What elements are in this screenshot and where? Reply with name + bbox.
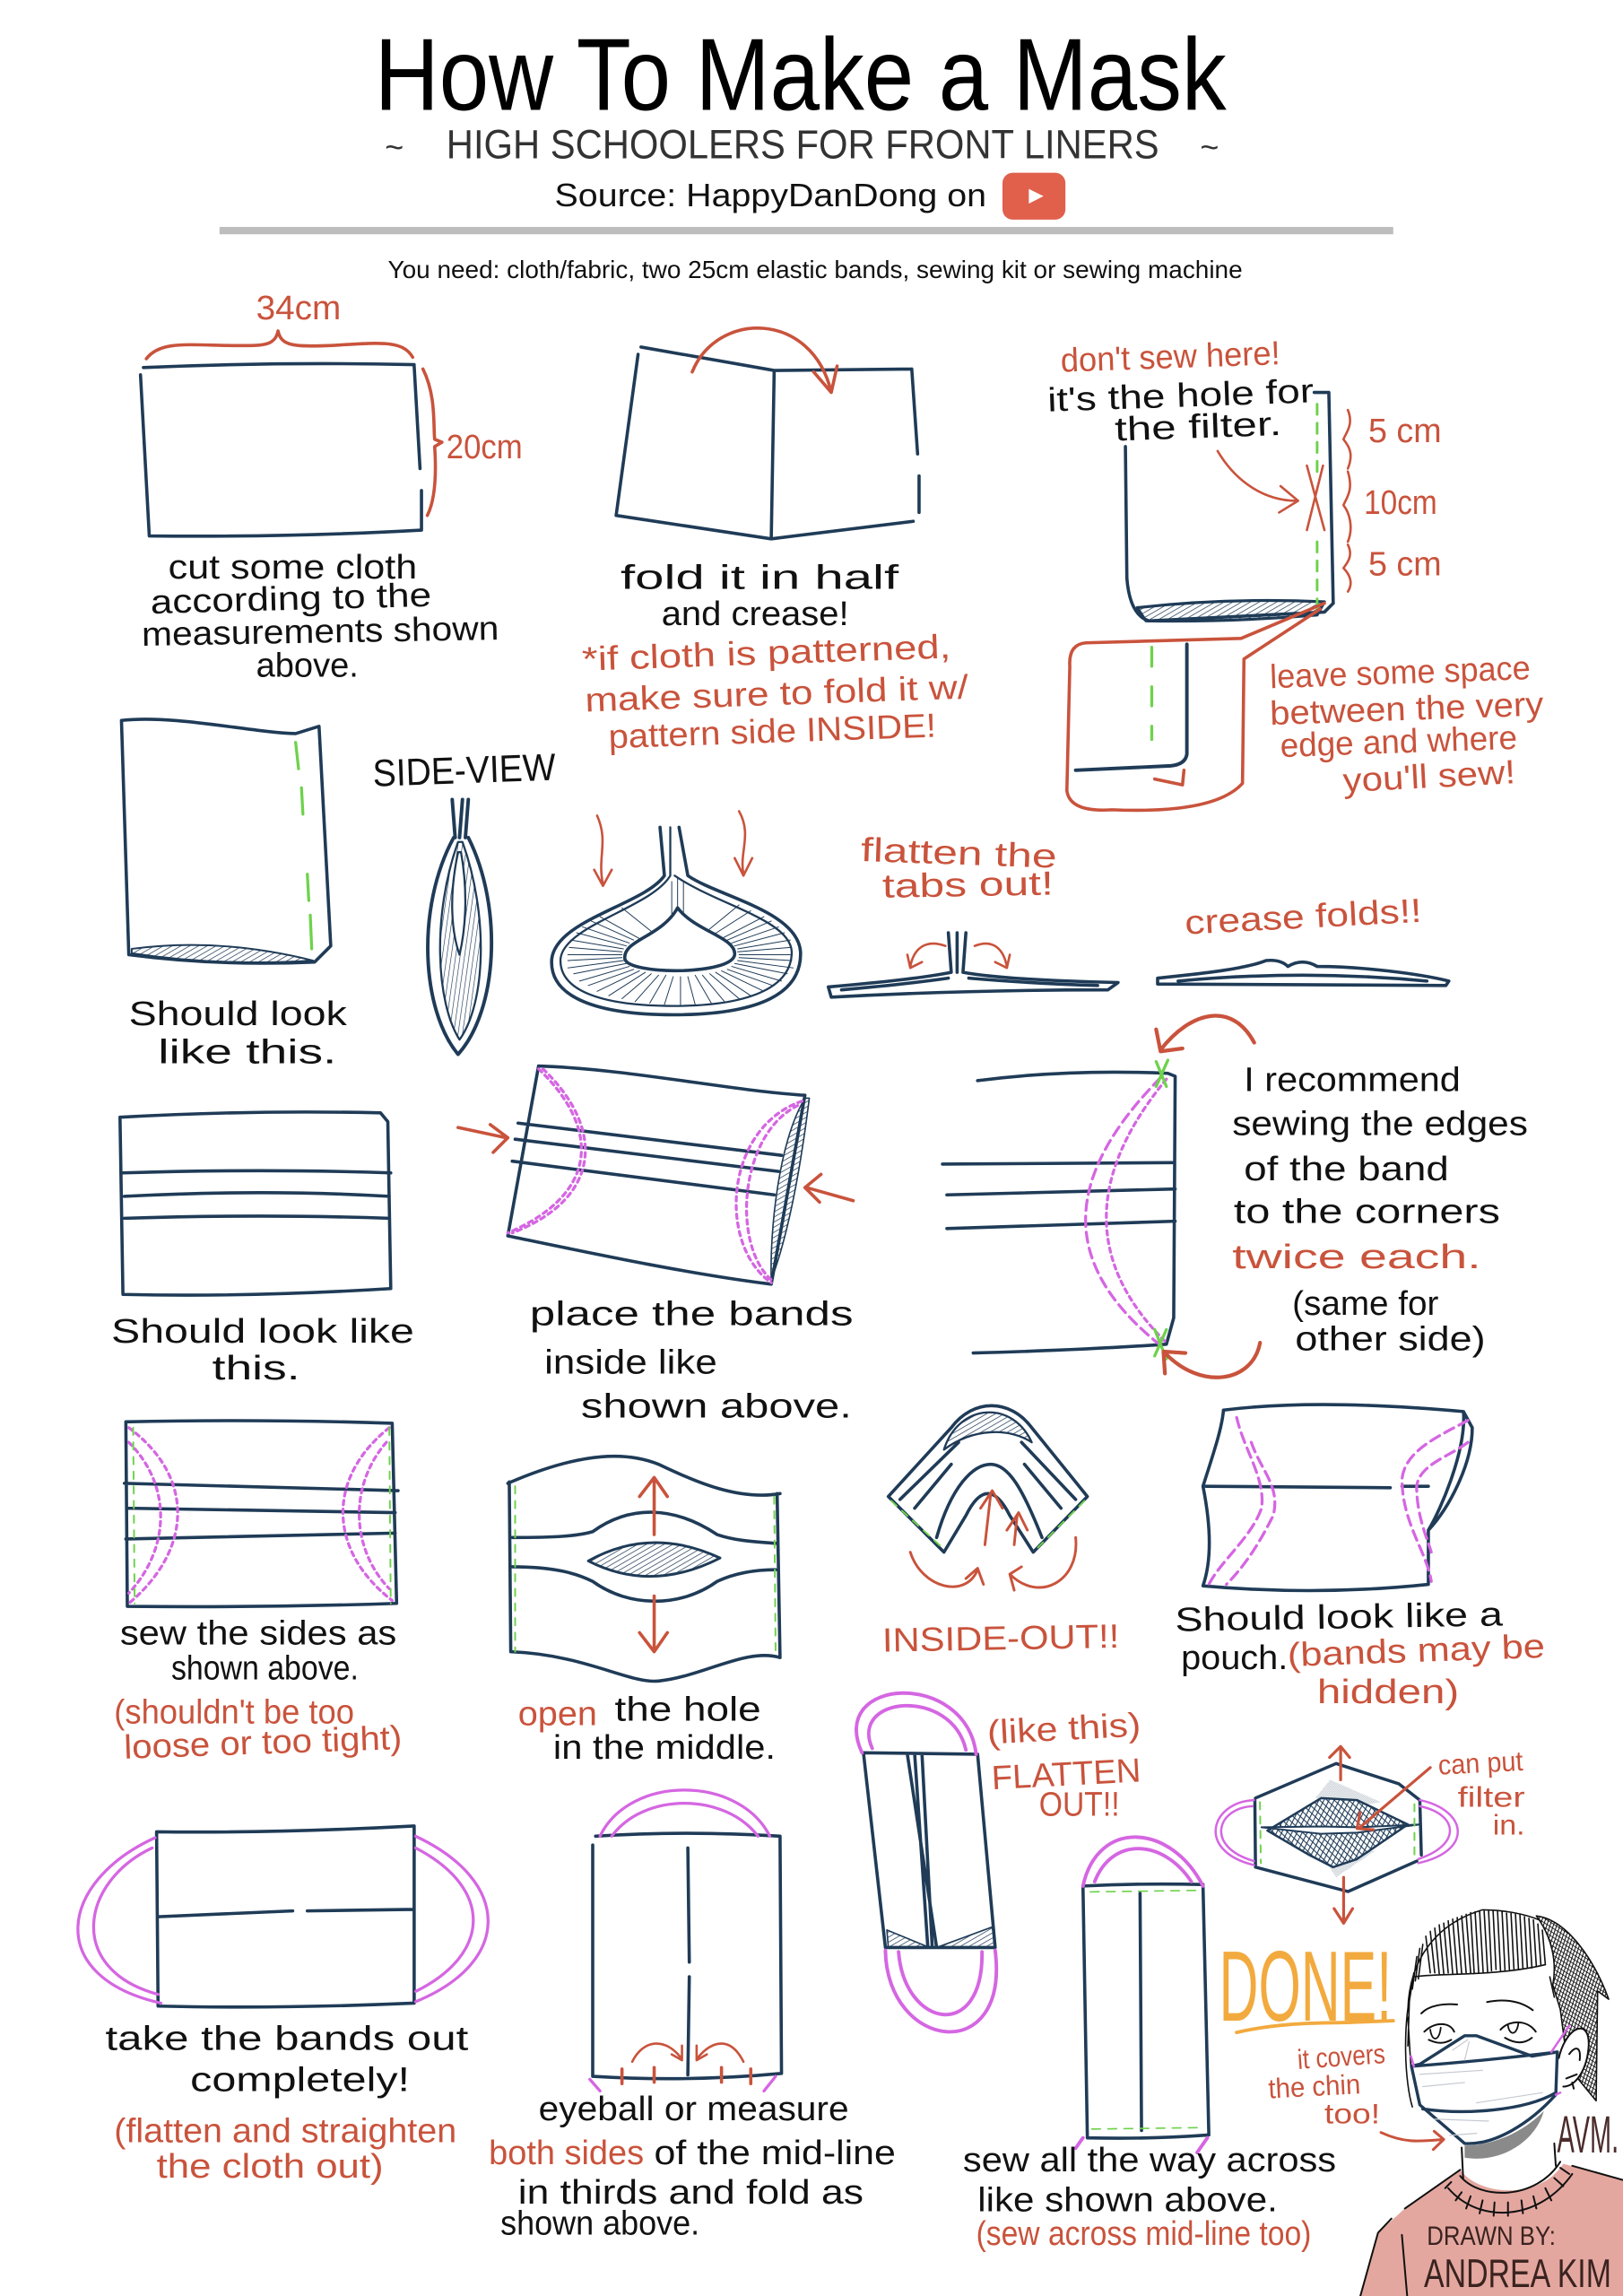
note: tension: (shouldn't be too xyxy=(114,1693,354,1731)
caption: measurements shown xyxy=(142,609,499,653)
folded mask drawing xyxy=(590,1790,782,2091)
recommendation note: sewing the edges xyxy=(1232,1104,1528,1142)
filter note xyxy=(1437,1745,1525,1841)
note: flatten tabs: flatten the xyxy=(860,831,1057,875)
opened loop drawing xyxy=(551,827,801,1014)
filter hole note: it's the hole for xyxy=(1046,371,1315,419)
filter note: can put xyxy=(1437,1745,1524,1781)
caption: like this. xyxy=(158,1032,336,1070)
step: fold in half xyxy=(581,328,969,755)
step: inside-out xyxy=(882,1405,1120,1659)
step: fold in thirds xyxy=(489,1790,896,2241)
height brace xyxy=(423,369,442,516)
opened cloth drawing xyxy=(508,1457,780,1682)
folded cloth with bands xyxy=(508,1066,810,1284)
step: sew the sides xyxy=(114,1421,403,1766)
caption xyxy=(530,1295,854,1424)
note: tension xyxy=(114,1693,403,1766)
note: flatten tabs xyxy=(860,831,1057,905)
recommendation note: of the band xyxy=(1244,1150,1449,1187)
title: How To Make a Mask xyxy=(375,18,1227,132)
creased drawing xyxy=(1158,961,1449,986)
note: leave space: leave some space xyxy=(1269,648,1531,695)
arrow to chin xyxy=(1381,2131,1444,2150)
note: flatten: (like this) xyxy=(986,1706,1141,1751)
folded cloth drawing xyxy=(1125,393,1333,622)
caption: sew all the way across xyxy=(963,2141,1336,2179)
caption: according to the xyxy=(150,576,432,621)
flat cloth with folds xyxy=(120,1112,391,1295)
note: pattern side inside: pattern side INSIDE! xyxy=(608,707,937,755)
caption: take the bands out xyxy=(106,2020,469,2057)
caption: shown above. xyxy=(171,1649,359,1687)
recommendation note: twice each. xyxy=(1232,1238,1481,1275)
caption: open xyxy=(518,1694,597,1732)
width label: 34cm xyxy=(256,289,341,326)
chin note: it covers xyxy=(1297,2038,1386,2075)
note: flatten cloth: (flatten and straighten xyxy=(114,2112,456,2150)
filter note: in. xyxy=(1493,1810,1525,1841)
caption: inside like xyxy=(544,1343,717,1380)
corner arrows xyxy=(1156,1016,1260,1378)
warning note: don't sew here! xyxy=(1060,334,1280,379)
caption: sew the sides as xyxy=(120,1613,396,1651)
caption: (sew across mid-line too) xyxy=(976,2214,1311,2252)
note: flatten cloth xyxy=(114,2112,456,2185)
caption: (bands may be xyxy=(1287,1627,1546,1674)
caption xyxy=(111,1312,414,1387)
caption: cut some cloth xyxy=(169,548,417,586)
artist credit xyxy=(1424,2222,1611,2296)
chin shading xyxy=(1464,2111,1544,2159)
chin note: the chin xyxy=(1268,2068,1361,2105)
note: tension: loose or too tight) xyxy=(124,1718,403,1766)
step: should look like this pouch xyxy=(121,719,347,1070)
pouch drawing xyxy=(121,719,331,963)
step: sew sides with hole xyxy=(1046,334,1544,810)
caption: fold it in half xyxy=(621,558,899,596)
caption: and crease! xyxy=(662,595,849,632)
done heading xyxy=(1219,1931,1393,2042)
caption: like shown above. xyxy=(977,2180,1278,2218)
note: flatten: OUT!! xyxy=(1039,1785,1120,1822)
folded cloth drawing xyxy=(616,347,919,539)
note: leave space xyxy=(1269,648,1544,799)
recommendation note xyxy=(1232,1060,1528,1357)
step: sew band edges xyxy=(942,1016,1528,1378)
source line: Source: HappyDanDong on xyxy=(555,177,986,213)
mask on face xyxy=(1411,2036,1558,2144)
caption: both sides xyxy=(489,2134,644,2171)
caption: the hole xyxy=(614,1690,761,1727)
band detail drawing xyxy=(942,1060,1176,1359)
label: INSIDE-OUT!! xyxy=(882,1617,1120,1659)
cloth rectangle drawing xyxy=(141,363,421,536)
pouch drawing xyxy=(1203,1405,1472,1590)
turning arrows xyxy=(910,1491,1076,1590)
caption xyxy=(129,995,347,1070)
finished mask with filter pocket xyxy=(1216,1746,1458,1923)
caption xyxy=(1175,1595,1546,1710)
tall folded mask drawing xyxy=(856,1693,996,2031)
portrait wearing mask xyxy=(1360,1909,1623,2296)
header rule xyxy=(220,227,1393,234)
filter hole note: the filter. xyxy=(1114,404,1282,448)
note: pattern side inside: make sure to fold it w/ xyxy=(585,668,969,718)
ear xyxy=(1558,2029,1589,2089)
caption: shown above. xyxy=(500,2204,699,2241)
caption xyxy=(142,548,499,683)
caption: Should look xyxy=(129,995,347,1032)
icon: video play button xyxy=(1002,173,1065,220)
fold arrow xyxy=(692,328,838,393)
arrows pressing down xyxy=(595,811,752,886)
step: pouch xyxy=(1175,1405,1546,1710)
caption: in thirds and fold as xyxy=(518,2173,864,2211)
subtitle: ~ xyxy=(385,128,404,165)
caption: above. xyxy=(256,646,359,683)
measurement braces and labels: 10cm xyxy=(1364,483,1437,521)
arrows up and down xyxy=(639,1477,667,1652)
note: leave space: between the very xyxy=(1269,685,1544,732)
note: pattern side inside: *if cloth is patterned, xyxy=(581,627,951,678)
filter note: filter xyxy=(1458,1782,1525,1813)
measurement braces and labels: 5 cm xyxy=(1368,412,1442,449)
measurement braces and labels: 5 cm xyxy=(1368,545,1442,583)
height label: 20cm xyxy=(447,428,523,465)
subtitle: HIGH SCHOOLERS FOR FRONT LINERS xyxy=(447,121,1159,167)
chin note: too! xyxy=(1324,2098,1380,2129)
eyes and brows xyxy=(1421,2000,1536,2043)
step: flatten out xyxy=(856,1693,1141,2031)
note: flatten cloth: the cloth out) xyxy=(157,2147,384,2185)
note: flatten tabs: tabs out! xyxy=(882,864,1054,905)
caption: in the middle. xyxy=(553,1728,776,1766)
filter hole note xyxy=(1046,371,1315,448)
caption xyxy=(106,2020,469,2098)
caption: shown above. xyxy=(581,1387,852,1424)
caption xyxy=(518,1690,776,1766)
hair xyxy=(1406,1909,1554,2107)
caption: Should look like a xyxy=(1175,1595,1503,1639)
ponytail xyxy=(1536,1916,1609,2100)
caption: completely! xyxy=(190,2060,410,2098)
caption: hidden) xyxy=(1317,1673,1459,1710)
side-view lens drawing xyxy=(428,799,491,1055)
step: place the bands xyxy=(458,1066,854,1424)
done heading: DONE! xyxy=(1219,1931,1392,2042)
measurement braces and labels xyxy=(1343,410,1442,592)
recommendation note: (same for xyxy=(1292,1284,1438,1322)
caption: pouch. xyxy=(1181,1639,1288,1676)
caption xyxy=(621,558,899,632)
step: take the bands out xyxy=(78,1826,488,2185)
note: flatten: FLATTEN xyxy=(991,1751,1141,1796)
recommendation note: other side) xyxy=(1295,1319,1486,1357)
note: leave space: edge and where xyxy=(1280,718,1518,764)
caption xyxy=(120,1613,396,1687)
inverted pouch drawing xyxy=(889,1405,1088,1552)
step: cut cloth xyxy=(141,289,523,683)
outline of collar and neck xyxy=(1360,2144,1623,2296)
subtitle: ~ xyxy=(1200,128,1219,165)
caption: of the mid-line xyxy=(655,2134,896,2171)
note: pattern side inside xyxy=(581,627,969,755)
step: should look like this flat xyxy=(111,1112,414,1387)
sewn panel drawing xyxy=(1076,1837,1209,2152)
note: leave space: you'll sew! xyxy=(1341,752,1516,799)
caption: place the bands xyxy=(530,1295,854,1333)
materials list: You need: cloth/fabric, two 25cm elastic bands, sewing kit or sewing machine xyxy=(388,256,1243,283)
caption: this. xyxy=(213,1349,300,1387)
artist credit: DRAWN BY: xyxy=(1427,2222,1556,2251)
recommendation note: to the corners xyxy=(1234,1192,1500,1230)
step: open the hole xyxy=(508,1457,780,1766)
inward arrows xyxy=(458,1125,854,1202)
caption: Should look like xyxy=(111,1312,414,1350)
step: sew across xyxy=(963,1837,1336,2252)
note: flatten xyxy=(986,1706,1141,1822)
caption xyxy=(963,2141,1336,2252)
note: crease folds: crease folds!! xyxy=(1184,891,1422,942)
sweater xyxy=(1360,2164,1623,2296)
recommendation note: I recommend xyxy=(1244,1060,1461,1098)
caption: eyeball or measure xyxy=(539,2090,849,2127)
magnified callout xyxy=(1067,604,1324,810)
side-view label: SIDE-VIEW xyxy=(372,746,556,795)
flatten tabs drawing xyxy=(829,933,1118,997)
width brace xyxy=(146,331,412,359)
caption xyxy=(489,2090,896,2241)
chin note xyxy=(1268,2038,1386,2129)
sewing drawing xyxy=(125,1421,398,1606)
mask with bands drawing xyxy=(78,1826,488,2007)
arrow and X xyxy=(1218,451,1324,530)
